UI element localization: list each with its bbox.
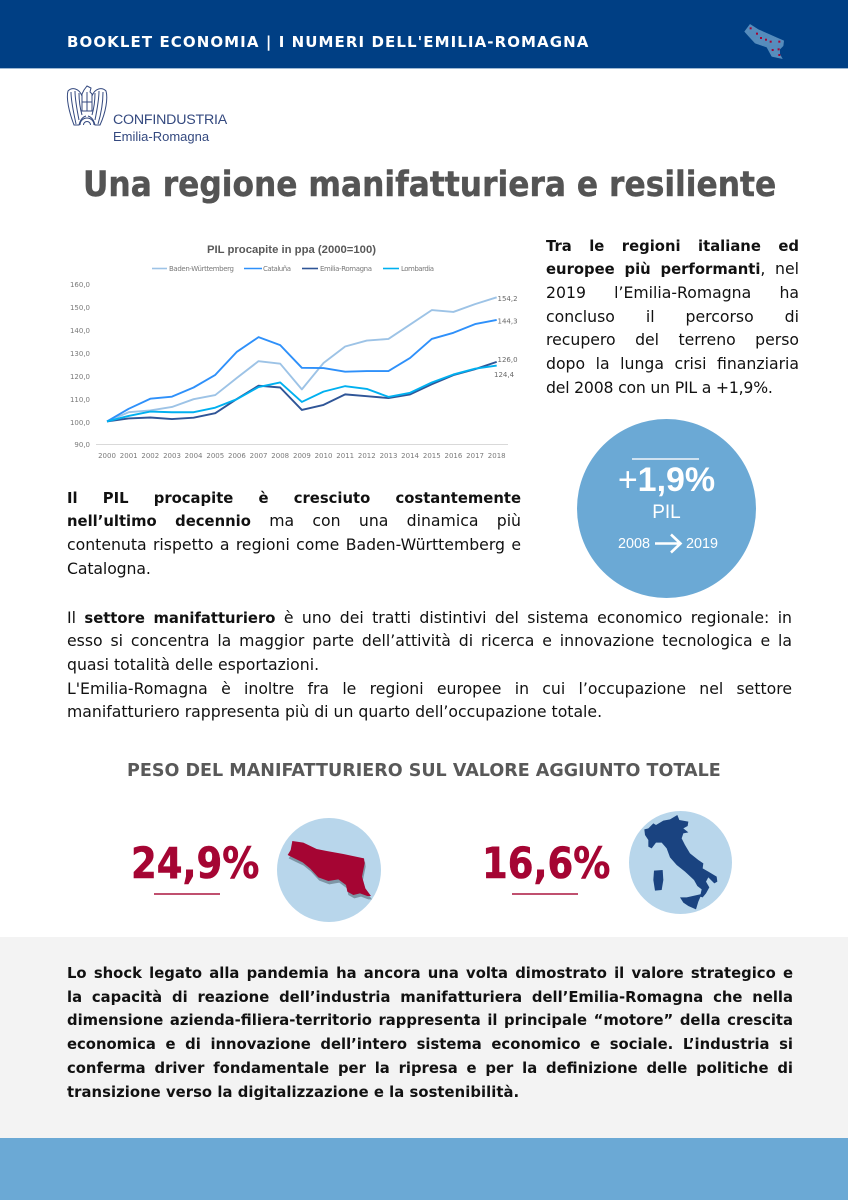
text block: settore manifatturiero: esso si concentra la maggior parte dell’attività di ricerca e innovazione tecnologica e la bbox=[67, 631, 792, 650]
line chart: PIL procapite in ppa bbox=[70, 244, 518, 460]
circle with regional map bbox=[277, 818, 381, 922]
text block: shock pandemia: transizione verso la digitalizzazione e la sostenibilità. bbox=[67, 1084, 519, 1101]
footer band bbox=[0, 1138, 848, 1200]
text block: shock pandemia: dimensione azienda-filiera-territorio rappresenta il principale “motore” della crescita bbox=[67, 1012, 793, 1029]
text block: shock pandemia: Lo shock legato alla pandemia ha ancora una volta dimostrato il valore strategico e bbox=[67, 965, 793, 982]
circle with Italy map bbox=[629, 810, 732, 914]
end year: 2019 bbox=[686, 536, 718, 552]
end value labels: 154,2 bbox=[498, 295, 518, 303]
line: Baden-Württemberg bbox=[107, 297, 497, 421]
logo: Confindustria Emilia-Romagna bbox=[66, 85, 228, 144]
text block: settore manifatturiero: Il settore manifatturiero è uno dei tratti distintivi del sistema economico regionale: in bbox=[67, 608, 792, 626]
text block: PIL procapite: Catalogna. bbox=[67, 559, 151, 578]
x axis labels: 2008 bbox=[271, 452, 289, 460]
text block: settore manifatturiero: quasi totalità delle esportazioni. bbox=[67, 655, 319, 674]
end value labels bbox=[494, 295, 518, 379]
y axis labels: 140,0 bbox=[70, 327, 90, 335]
callout circle: +1,9% PIL bbox=[577, 419, 756, 598]
icon: pixel map of Emilia-Romagna bbox=[744, 24, 784, 59]
x axis labels: 2007 bbox=[250, 452, 268, 460]
logo eagle mark bbox=[66, 85, 108, 126]
y axis labels: 110,0 bbox=[70, 396, 90, 404]
x axis labels: 2009 bbox=[293, 452, 311, 460]
callout rule bbox=[632, 458, 699, 460]
callout period bbox=[618, 534, 718, 554]
icon: arrow bbox=[655, 534, 682, 554]
text block: regioni performanti: 2019 l’Emilia-Romagna ha bbox=[546, 283, 799, 302]
header band bbox=[0, 0, 848, 69]
x axis labels: 2013 bbox=[380, 452, 397, 460]
stat: Italia 16,6% bbox=[482, 811, 732, 914]
stat rule bbox=[154, 893, 220, 894]
text block: shock pandemia bbox=[67, 965, 793, 1101]
x axis labels: 2002 bbox=[141, 452, 159, 460]
stat value: 24,9% bbox=[131, 838, 259, 888]
text block: PIL procapite: contenuta rispetto a regioni come Baden-Württemberg e bbox=[67, 535, 521, 554]
text block: PIL procapite bbox=[67, 490, 521, 578]
icon: Italy map bbox=[644, 815, 718, 910]
text block: regioni performanti: europee più performanti, nel bbox=[546, 259, 799, 278]
text block: shock pandemia: la capacità di reazione dell’industria manifatturiera dell’Emilia-Romagna che nella bbox=[67, 989, 793, 1006]
section heading: PESO DEL MANIFATTURIERO SUL VALORE AGGIUNTO TOTALE bbox=[127, 761, 721, 781]
y axis labels: 160,0 bbox=[70, 281, 90, 289]
x axis labels bbox=[98, 452, 506, 460]
text block: settore manifatturiero bbox=[67, 608, 792, 721]
title: Una regione manifatturiera e resiliente bbox=[83, 165, 776, 205]
x axis labels: 2010 bbox=[315, 452, 332, 460]
text block: regioni performanti: dopo la lunga crisi finanziaria bbox=[546, 354, 799, 373]
end value labels: 124,4 bbox=[494, 371, 515, 379]
x axis labels: 2011 bbox=[336, 452, 354, 460]
text block: shock pandemia: conferma driver fondamentale per la ripresa e per la definizione delle politiche di bbox=[67, 1060, 793, 1077]
x axis labels: 2006 bbox=[228, 452, 246, 460]
x axis labels: 2012 bbox=[358, 452, 376, 460]
callout value: +1,9% bbox=[618, 461, 715, 499]
y axis labels: 100,0 bbox=[70, 419, 90, 427]
bottom panel bbox=[0, 937, 848, 1138]
end value labels: 126,0 bbox=[498, 356, 518, 364]
line: Emilia-Romagna bbox=[107, 362, 497, 421]
x axis labels: 2000 bbox=[98, 452, 116, 460]
text block: regioni performanti bbox=[546, 238, 799, 397]
stat: Emilia-Romagna 24,9% bbox=[131, 818, 381, 922]
x axis labels: 2005 bbox=[206, 452, 224, 460]
start year: 2008 bbox=[618, 536, 650, 552]
logo wordmark: CONFINDUSTRIA bbox=[113, 112, 227, 128]
chart legend: Cataluña bbox=[263, 265, 291, 273]
x axis labels: 2015 bbox=[423, 452, 441, 460]
x axis labels: 2014 bbox=[401, 452, 420, 460]
stat value: 16,6% bbox=[482, 838, 610, 888]
y axis labels: 90,0 bbox=[74, 441, 90, 449]
x axis labels: 2003 bbox=[163, 452, 181, 460]
x axis labels: 2016 bbox=[444, 452, 463, 460]
x axis labels: 2001 bbox=[120, 452, 138, 460]
header title: BOOKLET ECONOMIA | I NUMERI DELL'EMILIA-ROMAGNA bbox=[67, 33, 589, 51]
text block: shock pandemia: economica e di innovazione dell’intero sistema economico e sociale. L’industria si bbox=[67, 1036, 793, 1053]
callout label: PIL bbox=[652, 502, 681, 523]
text block: settore manifatturiero: L'Emilia-Romagna è inoltre fra le regioni europee in cui l’occupazione nel settore bbox=[67, 679, 792, 698]
x axis labels: 2004 bbox=[185, 452, 203, 460]
chart title: PIL procapite in ppa (2000=100) bbox=[207, 244, 376, 256]
text block: PIL procapite: Il PIL procapite è cresciuto costantemente bbox=[67, 490, 521, 506]
text block: regioni performanti: recupero del terreno perso bbox=[546, 330, 799, 349]
y axis labels bbox=[70, 281, 90, 449]
y axis labels: 130,0 bbox=[70, 350, 90, 358]
text block: regioni performanti: del 2008 con un PIL a +1,9%. bbox=[546, 378, 773, 397]
logo subtitle: Emilia-Romagna bbox=[113, 129, 209, 144]
line: Cataluña bbox=[107, 320, 497, 421]
text block: regioni performanti: Tra le regioni italiane ed bbox=[546, 238, 799, 254]
x axis labels: 2018 bbox=[488, 452, 506, 460]
text block: regioni performanti: concluso il percorso di bbox=[546, 307, 799, 326]
chart legend: Emilia-Romagna bbox=[320, 265, 372, 273]
icon: Emilia-Romagna map bbox=[288, 841, 372, 900]
chart legend bbox=[152, 265, 434, 273]
y axis labels: 150,0 bbox=[70, 304, 90, 312]
x axis labels: 2017 bbox=[466, 452, 484, 460]
y axis labels: 120,0 bbox=[70, 373, 90, 381]
stat rule bbox=[512, 893, 578, 894]
end value labels: 144,3 bbox=[498, 318, 518, 326]
chart legend: Lombardia bbox=[401, 265, 434, 273]
text block: settore manifatturiero: manifatturiero rappresenta più di un quarto dell’occupazione totale. bbox=[67, 702, 602, 721]
chart legend: Baden-Württemberg bbox=[169, 265, 234, 273]
chart lines bbox=[107, 297, 497, 421]
line: Lombardia bbox=[107, 366, 497, 421]
text block: PIL procapite: nell’ultimo decennio ma con una dinamica più bbox=[67, 511, 521, 530]
